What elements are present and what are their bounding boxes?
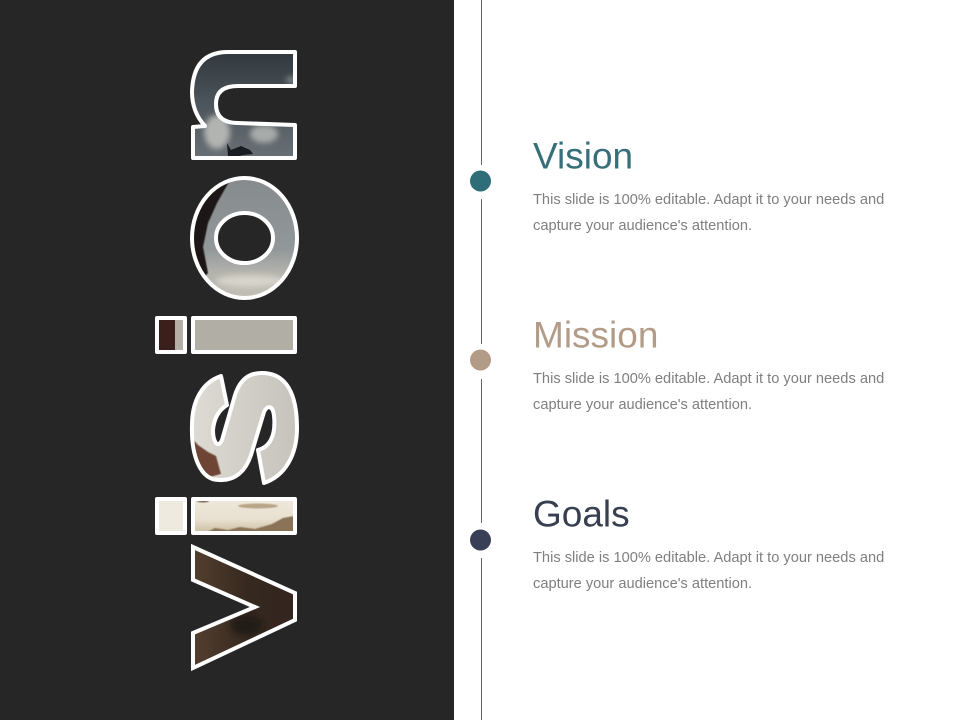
text block: goals description: This slide is 100% editable. Adapt it to your needs and bbox=[533, 550, 884, 566]
text block: vision description: capture your audience's attention. bbox=[533, 218, 752, 234]
text block: mission description: capture your audience's attention. bbox=[533, 397, 752, 413]
heading: vision: Vision bbox=[533, 136, 633, 176]
timeline node: mission bbox=[470, 350, 491, 370]
text block: vision description: This slide is 100% editable. Adapt it to your needs and bbox=[533, 192, 884, 208]
section: vision bbox=[533, 136, 884, 234]
section: goals bbox=[533, 494, 884, 592]
heading: goals: Goals bbox=[533, 494, 630, 534]
vertical word: vision bbox=[157, 50, 300, 670]
text block: mission description: This slide is 100% editable. Adapt it to your needs and bbox=[533, 371, 884, 387]
heading: mission: Mission bbox=[533, 314, 658, 356]
letter o with sky and hair photo fill bbox=[190, 175, 300, 300]
dark left panel bbox=[0, 0, 454, 720]
dot of letter i, lower bbox=[157, 499, 185, 533]
text block: goals description: capture your audience's attention. bbox=[533, 576, 752, 592]
stem of letter i, lower, with field photo fill bbox=[193, 499, 295, 533]
letter v with dark brown photo fill bbox=[190, 545, 298, 670]
timeline vertical line bbox=[481, 0, 482, 720]
stem of letter i, upper bbox=[193, 318, 295, 352]
letter s with light photo fill bbox=[190, 370, 300, 485]
section: mission bbox=[533, 314, 884, 413]
letter n with sky photo fill bbox=[190, 50, 298, 160]
timeline node: vision bbox=[470, 170, 491, 192]
timeline node: goals bbox=[470, 530, 491, 550]
dot of letter i, upper bbox=[157, 318, 185, 352]
